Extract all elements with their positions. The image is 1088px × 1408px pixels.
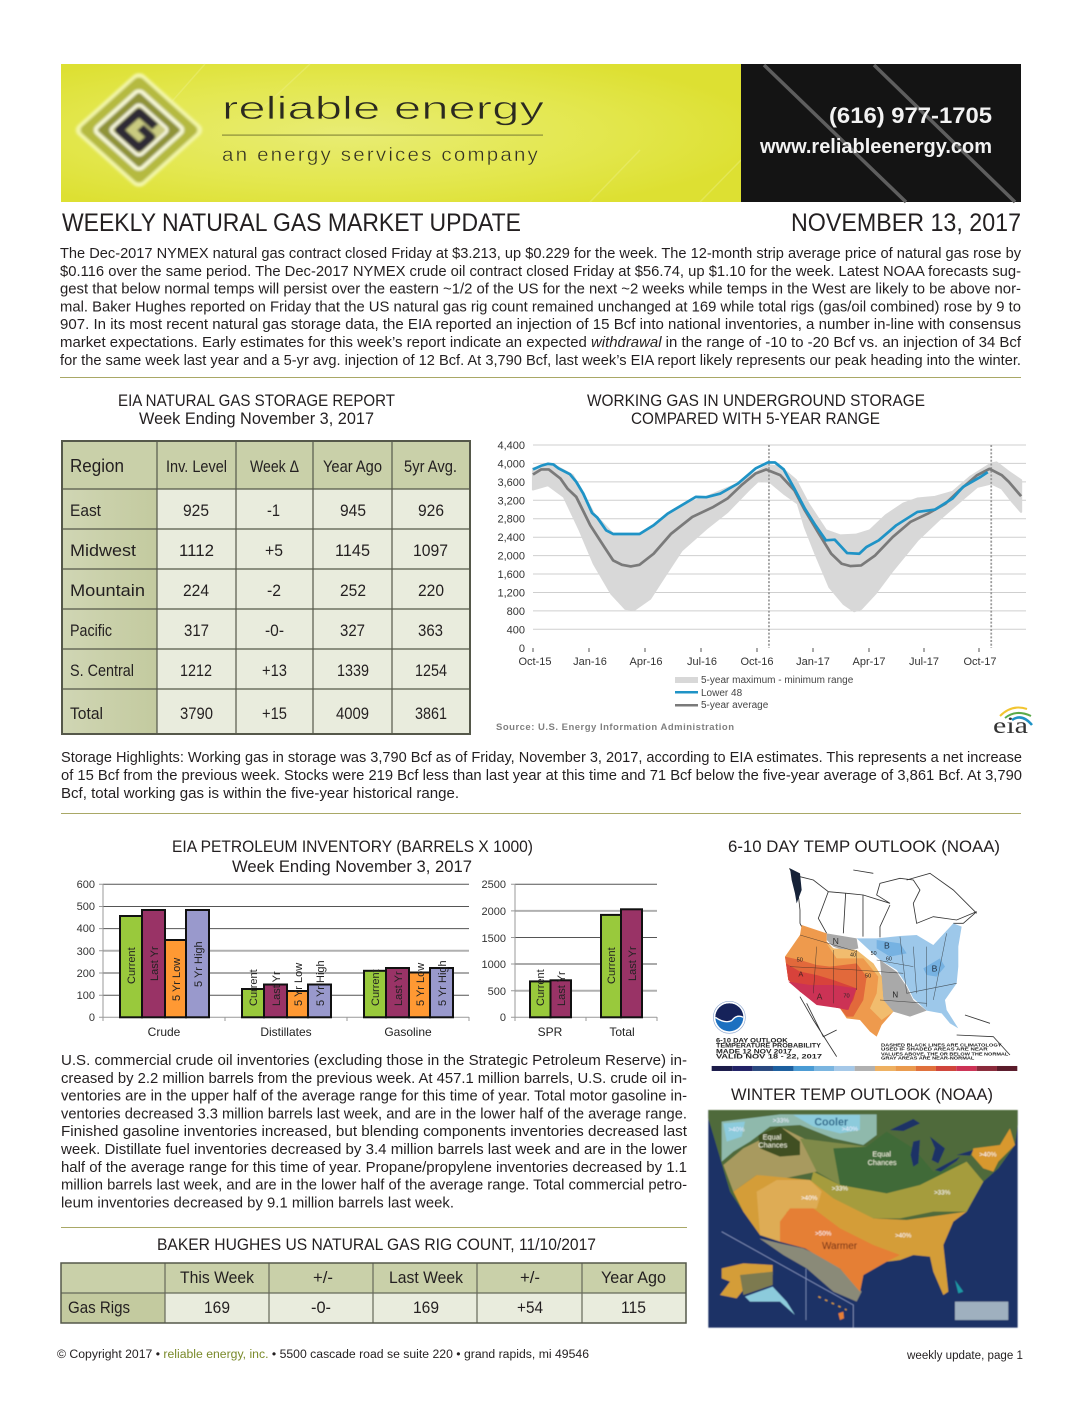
table row: Total: 4009 <box>336 704 369 723</box>
footer <box>57 1349 1023 1362</box>
table row: S. Central <box>70 661 447 680</box>
y axis labels: 300 <box>77 946 95 958</box>
land base <box>708 1110 1018 1302</box>
table header row: Region <box>70 455 124 476</box>
table row: Total: +15 <box>262 704 287 723</box>
text block: petroleum commentary: million barrels last week, and are in the lower half of the average range. Total commercial petro- <box>61 1178 687 1194</box>
map labels: Cooler <box>814 1117 848 1129</box>
bar chart: crude, distillates, gasoline <box>77 879 469 1039</box>
bar value labels: 5 Yr Low <box>293 963 305 1006</box>
title: WEEKLY NATURAL GAS MARKET UPDATE <box>62 209 521 237</box>
table row: Total: 3790 <box>180 704 213 723</box>
rig table row: gas rigs: Gas Rigs <box>68 1298 130 1317</box>
logo wordmark <box>222 90 544 166</box>
table row: Pacific: Pacific <box>70 621 112 640</box>
bar value labels <box>535 946 639 1006</box>
icon: eia logo <box>993 708 1032 738</box>
table row: East: -1 <box>267 501 280 520</box>
table row: East: 926 <box>418 501 444 520</box>
heading: 6-10 day outlook: 6-10 DAY TEMP OUTLOOK (NOAA) <box>728 837 1000 856</box>
bar value labels: 5 Yr High <box>193 941 205 987</box>
heading: storage report: Week Ending November 3, 2017 <box>139 409 374 428</box>
map caption: VALUES ABOVE, THE OR BELOW THE NORMAL <box>881 1051 1008 1057</box>
text block: petroleum commentary: Finished gasoline inventories increased, but blending components inventories decreased last <box>61 1124 687 1140</box>
chart x axis labels: Oct-17 <box>963 656 997 668</box>
table row: Pacific: 317 <box>184 621 209 640</box>
y axis labels: 500 <box>77 901 95 913</box>
chart y axis labels: 2,800 <box>497 514 525 526</box>
footer: weekly update, page 1 <box>906 1350 1023 1362</box>
table row: S. Central: 1339 <box>337 661 369 680</box>
bar value labels <box>126 941 449 1006</box>
line chart: working gas in storage <box>496 440 1032 738</box>
chart legend <box>675 675 854 711</box>
table row: S. Central: +13 <box>262 661 287 680</box>
y axis labels: 2000 <box>482 906 506 918</box>
map: category letters: 50 <box>797 958 803 964</box>
y axis labels: 200 <box>77 968 95 980</box>
text block: storage highlights: Storage Highlights: Working gas in storage was 3,790 Bcf as of Friday, November 3, 2017, according to EIA estimates. This represents a net increase <box>61 750 1022 766</box>
heading: storage report <box>118 391 395 428</box>
table row: Pacific: 327 <box>340 621 365 640</box>
table row: Mountain: 220 <box>418 581 444 600</box>
rig table row: gas rigs: +54 <box>517 1298 543 1317</box>
bar chart: SPR and total <box>482 879 657 1039</box>
map caption: DASHED BLACK LINES ARE CLIMATOLOGY <box>881 1043 1002 1049</box>
map caption: 6-10 DAY OUTLOOK <box>716 1039 789 1045</box>
contact panel: (616) 977-1705 <box>829 103 992 128</box>
rig table row: gas rigs: 115 <box>621 1298 646 1317</box>
line: lower 48 <box>533 462 988 554</box>
map labels: Equal <box>872 1150 891 1159</box>
text block: petroleum commentary: week. Distillate fuel inventories decreased by 3.4 million barrels last week and are in the lower <box>60 1142 687 1158</box>
table row: Midwest <box>70 541 448 560</box>
y axis labels <box>77 879 95 1024</box>
category labels <box>538 1025 635 1039</box>
table row: Midwest: +5 <box>265 541 283 560</box>
chart y axis labels: 4,400 <box>497 440 525 452</box>
table row: S. Central: 1212 <box>180 661 212 680</box>
rig table row: gas rigs: -0- <box>311 1298 331 1317</box>
text block: petroleum commentary: ventories decreased 3.3 million barrels last week, and are in the lower half of the average range. <box>61 1106 687 1122</box>
heading: working gas chart: COMPARED WITH 5-YEAR RANGE <box>631 409 880 428</box>
title <box>62 209 1021 237</box>
text block: market summary: gest that below normal temps will persist over the eastern ~1/2 of the US for the next ~2 weeks while temps in the West are likely to be above nor- <box>60 282 1021 298</box>
category labels: SPR <box>538 1025 563 1039</box>
map: category letters: A <box>798 970 803 979</box>
map caption <box>716 1039 1008 1061</box>
chart source: Source: U.S. Energy Information Administration <box>496 722 734 733</box>
chart y axis labels <box>497 440 525 655</box>
map labels: >50% <box>815 1231 832 1238</box>
map labels: >40% <box>728 1127 745 1134</box>
chart x axis labels: Oct-16 <box>740 656 774 668</box>
chart legend: Lower 48 <box>701 688 743 699</box>
contact panel <box>741 64 1021 202</box>
chart x axis labels: Jul-17 <box>909 656 939 668</box>
y axis labels: 600 <box>77 879 95 891</box>
heading: working gas chart <box>587 391 925 428</box>
map: category letters: A <box>817 991 823 1001</box>
map: category letters <box>797 936 938 1001</box>
table row: Mountain: -2 <box>267 581 281 600</box>
map labels <box>728 1117 997 1252</box>
map labels: >40% <box>801 1195 818 1202</box>
text block: petroleum commentary: leum inventories decreased by 9.1 million barrels last week. <box>61 1195 454 1211</box>
map labels: >40% <box>895 1233 912 1240</box>
bar value labels: 5 Yr High <box>437 960 449 1006</box>
table row: Pacific: -0- <box>265 621 284 640</box>
table row: S. Central: S. Central <box>70 661 134 680</box>
map: 6-10 day temperature outlook <box>712 868 1017 1071</box>
bar value labels: 5 Yr Low <box>171 958 183 1001</box>
text block: market summary: market expectations. Early estimates for this week’s report indicate an expected withdrawal in the range of -10 to -20 Bcf vs. an injection of 34 Bcf <box>60 335 1022 351</box>
text block: petroleum commentary: U.S. commercial crude oil inventories (excluding those in the Strategic Petroleum Reserve) in- <box>61 1053 687 1069</box>
table header row <box>70 455 457 476</box>
line: five-year average <box>533 469 1021 566</box>
table row: Mountain: 224 <box>183 581 209 600</box>
y axis labels: 100 <box>77 990 95 1002</box>
map caption: TEMPERATURE PROBABILITY <box>716 1044 821 1050</box>
map labels: >33% <box>773 1117 789 1124</box>
bars: crude <box>120 910 209 1017</box>
map: category letters: 70 <box>843 993 850 999</box>
text block: petroleum commentary <box>60 1053 687 1211</box>
text block: market summary <box>60 246 1022 369</box>
map labels: Equal <box>763 1132 782 1141</box>
alaska and hawaii insets <box>720 1232 1008 1328</box>
table row: Midwest: 1145 <box>335 541 370 560</box>
chart x axis labels: Apr-17 <box>852 656 886 668</box>
text block: storage highlights: Bcf, total working gas is within the five-year historical range. <box>61 786 459 802</box>
contact panel: www.reliableenergy.com <box>759 136 992 158</box>
chart x axis labels: Oct-15 <box>518 656 552 668</box>
table row: Mountain: Mountain <box>70 581 145 600</box>
chart y axis labels: 400 <box>507 624 525 636</box>
bar value labels: Last Yr <box>149 946 161 981</box>
y axis labels: 1500 <box>482 933 506 945</box>
logo wordmark: an energy services company <box>222 145 540 166</box>
category labels <box>148 1025 432 1039</box>
map: warm regions <box>785 925 893 1037</box>
table row: S. Central: 1254 <box>415 661 447 680</box>
map labels: >40% <box>979 1152 997 1159</box>
bar value labels: Current <box>370 969 382 1006</box>
text block: petroleum commentary: creased by 2.2 million barrels from the previous week. At 457.1 million barrels, U.S. crude oil in- <box>61 1071 687 1087</box>
y axis labels: 500 <box>488 986 506 998</box>
table row: Pacific <box>70 621 443 640</box>
rig table header: Last Week <box>389 1268 463 1287</box>
text block: storage highlights: of 15 Bcf from the previous week. Stocks were 219 Bcf less than last year at this time and 71 Bcf below the five-year average of 3,861 Bcf. At 3,790 <box>61 768 1022 784</box>
logo wordmark: reliable energy <box>222 90 544 126</box>
map: category letters: N <box>892 990 898 999</box>
table row: Total: Total <box>70 704 103 723</box>
chart legend: 5-year maximum - minimum range <box>701 675 854 686</box>
table header row: Year Ago <box>323 457 382 476</box>
chart x axis labels: Jul-16 <box>687 656 717 668</box>
table row: Midwest: Midwest <box>70 541 136 560</box>
heading: petroleum inventory: Week Ending November 3, 2017 <box>232 857 472 876</box>
table row: East: 945 <box>340 501 366 520</box>
text block: market summary: mal. Baker Hughes reported on Friday that the US natural gas rig count remained unchanged at 169 while total rigs (gas/oil combined) rose by 9 to <box>60 299 1021 315</box>
chart x axis labels: Apr-16 <box>629 656 663 668</box>
map caption: GRAY AREAS ARE NEAR-NORMAL <box>881 1055 974 1061</box>
rig table row: gas rigs <box>68 1298 646 1317</box>
rig table header: +/- <box>520 1268 540 1287</box>
bar value labels: Current <box>535 969 547 1006</box>
rig table header: Year Ago <box>601 1268 666 1287</box>
chart y axis labels: 2,000 <box>497 551 525 563</box>
map: state lines <box>790 933 957 1007</box>
bar value labels: 5 Yr Low <box>415 963 427 1006</box>
chart y axis labels: 3,200 <box>497 495 525 507</box>
heading: storage report: EIA NATURAL GAS STORAGE REPORT <box>118 391 395 410</box>
table row: East: 925 <box>183 501 209 520</box>
banner: green logo panel <box>61 64 741 202</box>
bar value labels: Last Yr <box>556 971 568 1006</box>
table header row: 5yr Avg. <box>404 457 457 476</box>
map: category letters: B <box>932 964 938 974</box>
category labels: Total <box>609 1025 635 1039</box>
text block: market summary: for the same week last year and a 5-yr avg. injection of 12 Bcf. At 3,790 Bcf, last week’s EIA report likely represents our peak heading into the winter. <box>60 353 1021 369</box>
map: category letters: B <box>884 941 890 951</box>
table row: Mountain: 252 <box>340 581 366 600</box>
y axis labels: 1000 <box>482 959 506 971</box>
table row: Midwest: 1112 <box>179 541 214 560</box>
icon: NOAA logo <box>713 1001 745 1033</box>
text block: market summary: $0.116 over the same period. The Dec-2017 NYMEX crude oil contract closed Friday at $56.74, up $1.10 for the week. Latest NOAA forecasts sug- <box>60 264 1021 280</box>
map colour scale <box>712 1066 1017 1071</box>
map labels: >33% <box>832 1185 848 1192</box>
bar value labels: Current <box>606 947 618 984</box>
bar value labels: Last Yr <box>271 971 283 1006</box>
bar value labels: Last Yr <box>393 971 405 1006</box>
chart x axis labels: Jan-16 <box>573 656 607 668</box>
map: category letters: 50 <box>865 973 871 979</box>
table row: Total: 3861 <box>415 704 447 723</box>
y axis labels <box>482 879 506 1024</box>
text block: petroleum commentary: ventories are in the upper half of the average range for this time of year. Total motor gasoline in- <box>61 1089 687 1105</box>
map: category letters: N <box>833 936 839 946</box>
chart y axis labels: 1,600 <box>497 569 525 581</box>
bar value labels: Current <box>248 969 260 1006</box>
table row: East: East <box>70 501 101 520</box>
icon: reliable energy diamond logo <box>73 70 205 190</box>
rig table header <box>180 1268 666 1287</box>
map labels: Chances <box>868 1158 897 1167</box>
bars: SPR <box>530 980 571 1017</box>
category labels: Crude <box>148 1025 181 1039</box>
map caption: MADE 12 NOV 2017 <box>716 1049 793 1055</box>
map: category letters: 50 <box>871 951 877 957</box>
heading: winter outlook: WINTER TEMP OUTLOOK (NOAA) <box>731 1085 993 1104</box>
map labels: >40% <box>842 1126 858 1133</box>
y axis labels: 400 <box>77 923 95 935</box>
map caption: VALID NOV 18 - 22, 2017 <box>716 1054 823 1060</box>
table: storage report <box>62 441 470 734</box>
cooler region <box>722 1114 877 1162</box>
map labels: Chances <box>758 1141 788 1150</box>
title: NOVEMBER 13, 2017 <box>791 209 1021 237</box>
chart legend: 5-year average <box>701 700 769 711</box>
category labels: Gasoline <box>384 1025 432 1039</box>
table header row: Inv. Level <box>166 457 227 476</box>
map caption: USED IF SHADED AREAS ARE NEAR <box>881 1047 988 1053</box>
heading: working gas chart: WORKING GAS IN UNDERGROUND STORAGE <box>587 391 925 410</box>
y axis labels: 2500 <box>482 879 506 891</box>
chart y axis labels: 0 <box>519 643 525 655</box>
bars: total <box>601 909 642 1017</box>
y axis labels: 0 <box>89 1012 95 1024</box>
map labels: >33% <box>934 1189 951 1196</box>
chart y axis labels: 800 <box>507 606 525 618</box>
chart y axis labels: 3,600 <box>497 477 525 489</box>
table row: Pacific: 363 <box>418 621 443 640</box>
table row: Midwest: 1097 <box>413 541 448 560</box>
text block: market summary: 907. In its most recent natural gas storage data, the EIA reported an injection of 15 Bcf into national inventories, a number in-line with consensus <box>60 317 1021 333</box>
text block: petroleum commentary: half of the average range for this time of year. Propane/propylene inventories decreased by 1.1 <box>61 1160 687 1176</box>
bar value labels: Current <box>126 947 138 984</box>
map: category letters: 60 <box>886 957 892 963</box>
chart y axis labels: 2,400 <box>497 532 525 544</box>
text block: market summary: The Dec-2017 NYMEX natural gas contract closed Friday at $3.213, up $0.229 for the week. The 12-month strip average price of natural gas rose by <box>60 246 1022 262</box>
map: near-normal regions <box>827 933 927 1017</box>
rig table header: +/- <box>313 1268 333 1287</box>
chart x axis labels <box>518 656 997 668</box>
table row: Mountain <box>70 581 444 600</box>
map labels: Warmer <box>822 1241 858 1252</box>
header banner <box>61 64 1021 202</box>
bars: distillates <box>242 984 331 1017</box>
heading: petroleum inventory <box>172 837 533 876</box>
heading: rig count: BAKER HUGHES US NATURAL GAS RIG COUNT, 11/10/2017 <box>157 1235 596 1254</box>
category labels: Distillates <box>260 1025 312 1039</box>
table row: East <box>70 501 444 520</box>
heading: petroleum inventory: EIA PETROLEUM INVENTORY (BARRELS X 1000) <box>172 837 533 856</box>
chart x axis labels: Jan-17 <box>796 656 830 668</box>
map: category letters: 40 <box>850 953 856 959</box>
map: winter temperature outlook <box>708 1110 1018 1328</box>
bar value labels: 5 Yr High <box>315 960 327 1006</box>
map: cold regions <box>857 923 962 1028</box>
warm bands <box>733 1128 1015 1295</box>
bar value labels: Last Yr <box>627 946 639 981</box>
footer: © Copyright 2017 • reliable energy, inc. • 5500 cascade road se suite 220 • grand rapids, mi 49546 <box>57 1349 589 1361</box>
five-year range band <box>533 462 1021 611</box>
rig table row: gas rigs: 169 <box>204 1298 230 1317</box>
chart y axis labels: 4,000 <box>497 458 525 470</box>
y axis labels: 0 <box>500 1012 506 1024</box>
bars: gasoline <box>364 968 453 1017</box>
table header row: Week Δ <box>250 457 299 476</box>
rig table header: This Week <box>180 1268 254 1287</box>
chart y axis labels: 1,200 <box>497 588 525 600</box>
table: rig count <box>61 1263 686 1323</box>
rig table row: gas rigs: 169 <box>413 1298 439 1317</box>
text block: storage highlights <box>61 750 1022 802</box>
great lakes <box>890 1119 973 1172</box>
map: Canada outlines <box>789 868 1010 1057</box>
table row: Total <box>70 704 447 723</box>
icon: eia logo: eia <box>993 713 1028 738</box>
